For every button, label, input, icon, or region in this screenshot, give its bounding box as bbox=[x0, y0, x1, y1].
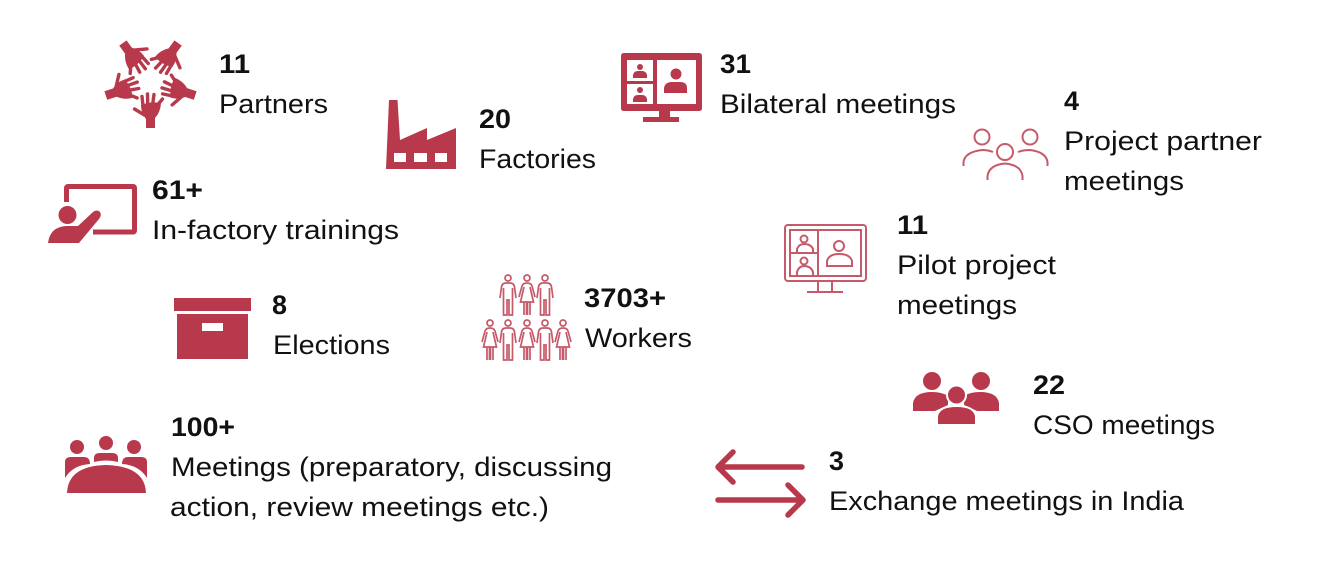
icon: ballot box bbox=[174, 298, 251, 359]
icon: group of workers bbox=[482, 275, 571, 360]
label: meetings: meetings bbox=[1064, 166, 1184, 196]
item: elections bbox=[174, 290, 390, 360]
icon: video call monitor solid bbox=[621, 53, 702, 122]
label: elections: Elections bbox=[273, 330, 390, 360]
item: project partner meetings bbox=[964, 86, 1262, 196]
number: 4: 4 bbox=[1064, 86, 1079, 116]
label: meetings line one: Meetings (preparatory, discussing bbox=[171, 452, 612, 482]
number: 11 pilot: 11 bbox=[897, 210, 928, 240]
icon: factory bbox=[386, 100, 456, 169]
number: 31 bilateral: 31 bbox=[720, 49, 751, 79]
icon: people around table bbox=[65, 436, 147, 493]
arrow: exchange left and right bbox=[718, 452, 803, 515]
icon: video call monitor outline bbox=[785, 225, 866, 292]
label: exchange meetings in india: Exchange meetings in India bbox=[829, 486, 1185, 516]
icon: five hands bbox=[101, 34, 199, 128]
label: workers: Workers bbox=[585, 323, 692, 353]
label: meetings: meetings bbox=[897, 290, 1017, 320]
label: cso meetings: CSO meetings bbox=[1033, 410, 1215, 440]
number: 20 factories: 20 bbox=[479, 104, 511, 134]
item: cso meetings bbox=[913, 370, 1215, 440]
number: 3703+: 3703+ bbox=[584, 283, 666, 313]
label: factories: Factories bbox=[479, 144, 596, 174]
item: meetings bbox=[65, 412, 612, 522]
number: 100+: 100+ bbox=[171, 412, 235, 442]
item: partners bbox=[101, 34, 328, 128]
label: in-factory trainings: In-factory trainings bbox=[152, 215, 399, 245]
item: factories bbox=[386, 100, 596, 174]
item: bilateral meetings bbox=[621, 49, 956, 122]
label: project partner: Project partner bbox=[1064, 126, 1262, 156]
item: workers bbox=[482, 275, 692, 360]
number: 8: 8 bbox=[272, 290, 287, 320]
item: pilot project meetings bbox=[785, 210, 1057, 320]
label: partners: Partners bbox=[219, 89, 328, 119]
item: exchange meetings bbox=[718, 446, 1185, 516]
icon: three people outline bbox=[964, 130, 1048, 180]
number: 3: 3 bbox=[829, 446, 844, 476]
item: in-factory trainings bbox=[48, 175, 399, 245]
number: 61+: 61+ bbox=[152, 175, 203, 205]
label: bilateral meetings: Bilateral meetings bbox=[720, 89, 956, 119]
number: 11 partners: 11 bbox=[219, 49, 250, 79]
number: 22: 22 bbox=[1033, 370, 1065, 400]
icon: three people solid bbox=[913, 372, 999, 425]
label: pilot project: Pilot project bbox=[897, 250, 1057, 280]
icon: presenter at board bbox=[48, 186, 134, 243]
label: meetings line two: action, review meetings etc.) bbox=[170, 492, 549, 522]
